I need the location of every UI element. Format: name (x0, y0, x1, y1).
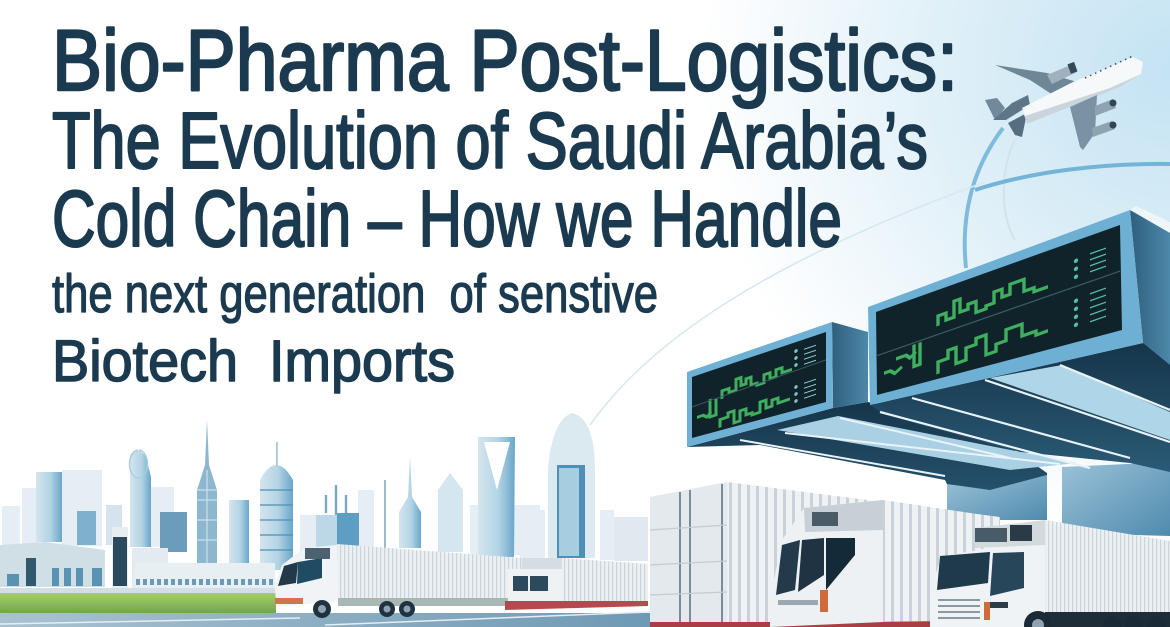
overhead monitoring gantry: right container and pillars (868, 206, 1170, 536)
towers (36, 472, 62, 542)
truck: large white container (650, 482, 1000, 627)
ground: grass and road (0, 588, 1170, 627)
title: The Evolution of Saudi Arabia’s (52, 96, 928, 185)
skyline (0, 413, 648, 588)
title: Bio-Pharma Post-Logistics: (52, 13, 958, 109)
truck: front right with long container (930, 520, 1170, 627)
title (52, 13, 958, 394)
truck: front cab (left of pair) (770, 500, 997, 627)
title: Cold Chain – How we Handle (52, 174, 842, 263)
distant buildings (2, 470, 614, 565)
title: the next generation of senstive (52, 264, 658, 324)
low buildings (0, 542, 105, 587)
overhead monitoring gantry: left container (687, 322, 1077, 520)
icon: airplane (985, 56, 1143, 150)
flight path arcs (590, 128, 1170, 425)
truck: distant left (275, 544, 522, 618)
title: Biotech Imports (52, 329, 455, 394)
truck: distant middle (505, 558, 648, 610)
